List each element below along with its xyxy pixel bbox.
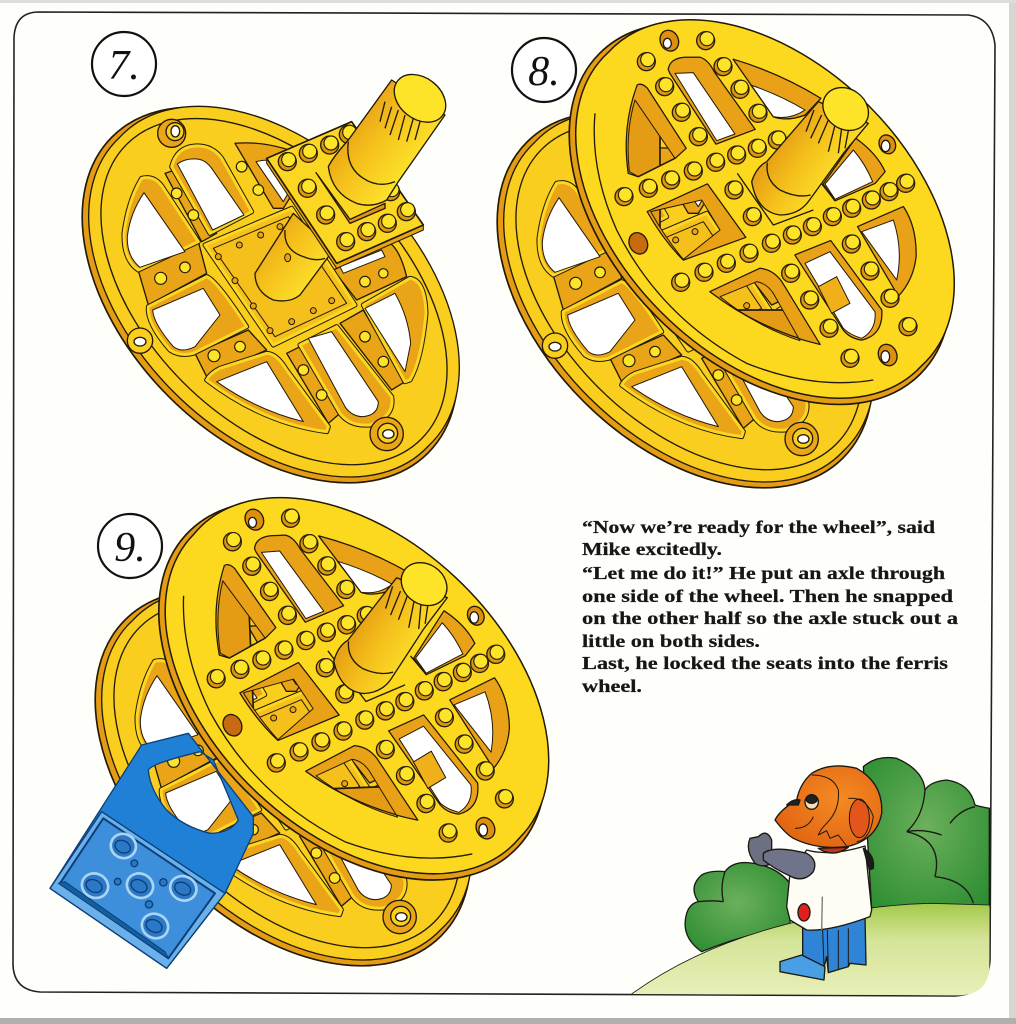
story text block: one side of the wheel. Then he snapped (582, 586, 953, 606)
step 7 number badge: 7. (108, 43, 140, 89)
story text block: on the other half so the axle stuck out a (582, 608, 958, 628)
step 9 number badge: 9. (114, 525, 146, 571)
step 9 number badge (98, 514, 162, 578)
step 7 wheel with axle and plate (82, 65, 459, 483)
story text block: “Let me do it!” He put an axle through (582, 563, 945, 583)
step 9 back wheel (95, 589, 472, 966)
story text block: little on both sides. (582, 631, 760, 651)
blue seat (50, 733, 253, 968)
step 8 number badge (512, 38, 576, 102)
story text block: wheel. (582, 676, 642, 696)
step 7 number badge (92, 32, 156, 96)
monkey scene with bushes and hill (632, 758, 989, 995)
step 8 front wheel with axle (569, 20, 954, 404)
step 8 number badge: 8. (528, 49, 560, 95)
step 8 back wheel (497, 111, 874, 488)
step 9 front wheel with axle (154, 487, 554, 890)
story text block: Last, he locked the seats into the ferris (582, 653, 948, 673)
story text block: “Now we’re ready for the wheel”, said (582, 517, 935, 537)
story text block (582, 517, 958, 696)
story text block: Mike excitedly. (582, 539, 722, 559)
